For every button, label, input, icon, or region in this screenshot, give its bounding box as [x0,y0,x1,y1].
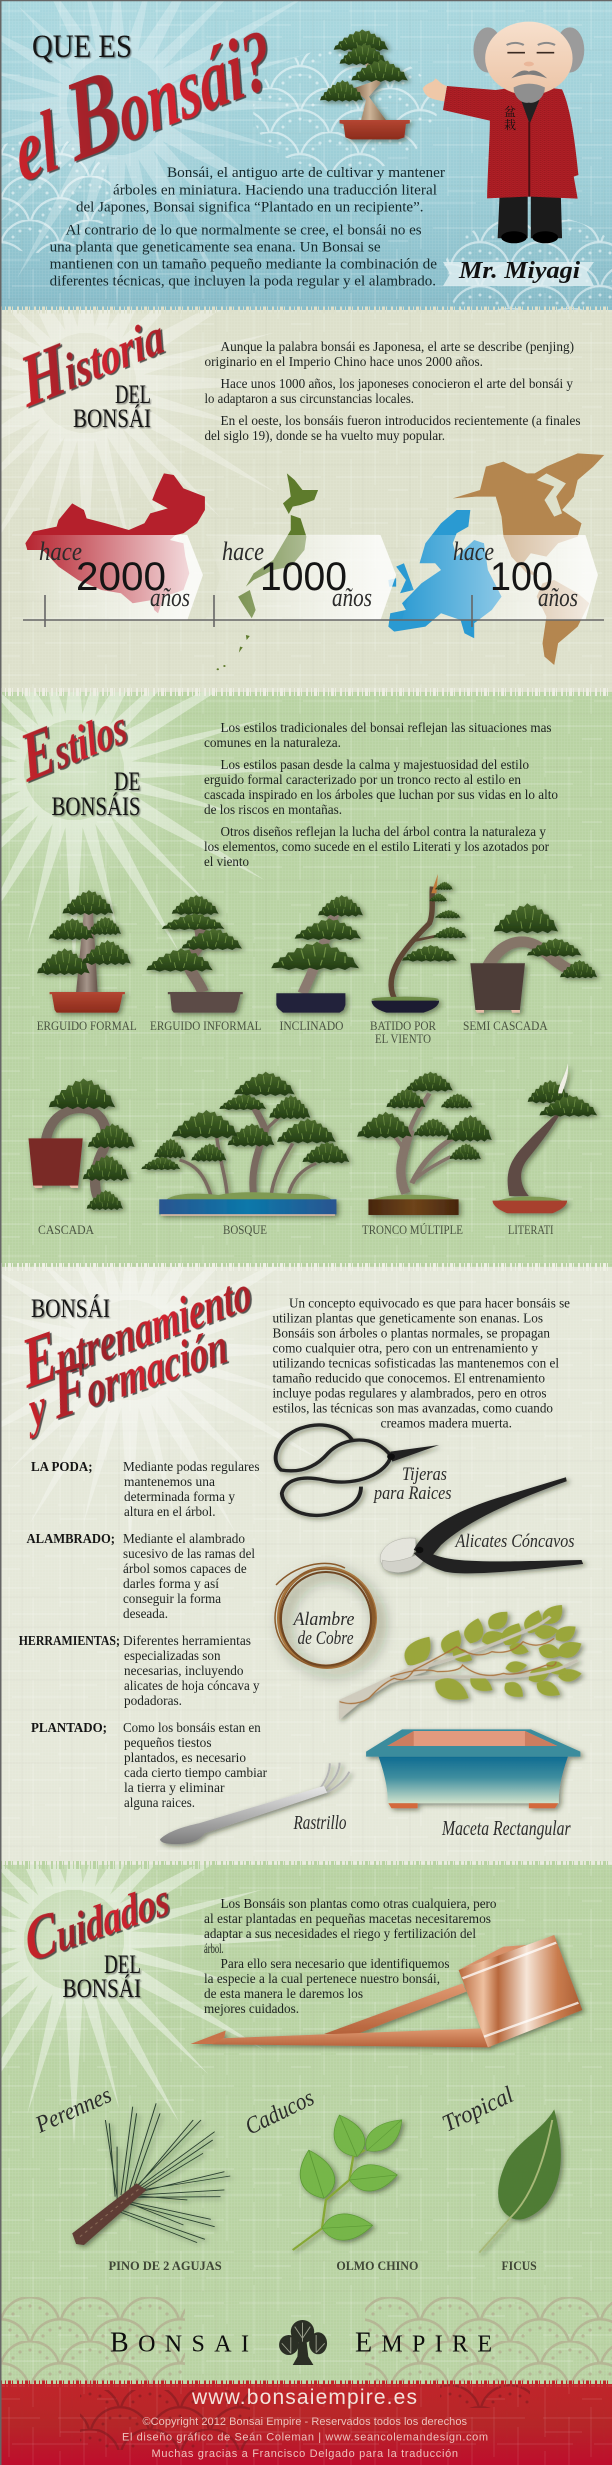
icon: chinese elm sprig [293,2111,411,2250]
label: tropical: Tropical [439,2082,518,2137]
heading: de bonsáis: DE [114,767,140,796]
species labels: PINO DE 2 AGUJAS [108,2258,222,2273]
label: hace 1000 años: hace [222,537,264,566]
text block: la poda [31,1460,260,1520]
species labels: OLMO CHINO [336,2258,418,2273]
heading: del bonsái [74,386,152,430]
panel: entrenamiento y formación [2,1267,612,1865]
tree: bosque [141,1072,349,1216]
logo mark: tree [279,2320,327,2365]
text block: la poda: Mediante podas regulares [123,1460,260,1475]
panel: historia del bonsái [2,310,612,692]
text block: concept: utilizan plantas que geneticamente son enanas. Los [272,1312,543,1327]
text block: concept: tamaño reducido que conocemos. El entrenamiento [272,1372,545,1387]
text block: intro: diferentes técnicas, que incluyen la poda regular y el alambrado. [50,274,436,290]
text block: plantado: plantados, es necesario [124,1751,246,1766]
label: alambre de cobre [292,1609,354,1649]
label: tijeras para raices: Tijeras [402,1464,447,1485]
labels row 1 [37,1022,548,1043]
heading: entrenamiento y formación: Entrenamiento [16,1246,256,1404]
text block: intro: mantienen con un tamaño pequeño mediante la combinación de [50,257,437,273]
heading: de bonsáis [52,772,142,818]
heading: del bonsái: BONSÁI [73,404,151,433]
tree: literati [493,1063,597,1213]
label: hace 100 años [454,542,578,606]
timeline with maps [23,453,604,670]
text block: herramientas: HERRAMIENTAS; [19,1634,120,1649]
label: hace 100 años: años [538,583,578,612]
panel: footer [0,2384,612,2465]
text block: care: árbol. [204,1942,224,1957]
text block: care: adaptar a sus necesidades el riego y fertilización del [204,1927,476,1942]
panel: estilos de bonsáis [2,692,612,1267]
text block: plantado [31,1721,267,1811]
label: alambre de cobre: de Cobre [298,1628,354,1649]
logo: bonsai empire: B ONSAI [110,2328,249,2359]
text block: history: originario en el Imperio Chino hace unos 2000 años. [204,355,483,370]
text block: herramientas: podadoras. [124,1694,182,1709]
label: hace 2000 años: hace [39,537,82,566]
text block: styles: comunes en la naturaleza. [204,736,341,751]
text block: history: lo adaptaron a sus circunstancias locales. [204,392,414,407]
labels row 1: SEMI CASCADA [463,1018,548,1033]
label: hace 2000 años [40,542,190,606]
tree: inclinado [271,895,363,1013]
icon: bonsai tree [320,29,410,139]
text block: care: mejores cuidados. [204,2002,299,2017]
text block: concept: incluye podas regulares y alambrados, pero en otros [272,1387,546,1402]
label: hace 100 años: 100 [490,555,553,599]
text block: care: Los Bonsáis son plantas como otras cualquiera, pero [220,1897,496,1912]
label: hace 2000 años: años [150,583,190,612]
heading: del bonsái: BONSÁI [62,1974,141,2003]
heading: de bonsáis: BONSÁIS [52,792,140,821]
icon: pine branch [72,2103,230,2245]
label: rastrillo: Rastrillo [293,1812,346,1834]
row of bonsai styles 1 [37,874,597,1013]
text block: alambrado: Mediante el alambrado [123,1532,245,1547]
text block: styles [204,721,558,870]
text block: care: de esta manera le daremos los [204,1987,363,2002]
text block: styles: Otros diseños reflejan la lucha del árbol contra la naturaleza y [220,825,546,840]
labels row 1: ERGUIDO INFORMAL [150,1018,262,1033]
text block: history [204,340,580,444]
heading: del bonsái: DEL [115,380,151,409]
label: maceta rectangular: Maceta Rectangular [441,1816,571,1840]
species labels [108,2258,537,2273]
footer url: www.bonsaiempire.es [191,2386,417,2409]
heading: del bonsái: DEL [104,1950,141,1979]
text block: styles: los elementos, como sucede en el estilo Literati y los azotados por [204,840,549,855]
label: hace 1000 años [222,542,372,606]
illustration: mr miyagi [423,22,584,243]
text block: plantado: la tierra y eliminar [124,1781,225,1796]
text block: alambrado [26,1532,255,1622]
text block: care: Para ello sera necesario que identifiquemos [220,1957,450,1972]
text block: concept [272,1297,570,1432]
text block: styles: Los estilos pasan desde la calma y majestuosidad del estilo [220,758,529,773]
text block: la poda: mantenemos una [124,1475,216,1490]
label: caducos: Caducos [241,2085,318,2140]
text block: alambrado: ALAMBRADO; [26,1532,115,1547]
panel: que es el bonsái [0,0,612,335]
text block: plantado: PLANTADO; [31,1721,107,1736]
text block: alambrado: sucesivo de las ramas del [123,1547,255,1562]
footer credits: Muchas gracias a Francisco Delgado para la traducción [152,2448,458,2460]
text block: intro: una planta que geneticamente sea enana. Un Bonsai se [50,240,381,256]
text block: plantado: cada cierto tiempo cambiar [124,1766,267,1781]
text block: alambrado: conseguir la forma [123,1592,222,1607]
icon: ficus leaf [479,2109,561,2253]
label: hace 2000 años: 2000 [76,555,166,599]
text block: concept: estilos, las técnicas son mas avanzadas, como cuando [272,1402,553,1417]
text block: plantado: alguna raices. [124,1796,195,1811]
tree: batido por el viento [372,874,466,1013]
text block: care: la especie a la cual pertenece nuestro bonsái, [204,1972,440,1987]
label: perennes: Perennes [31,2082,116,2139]
text block: intro: Bonsái, el antiguo arte de cultivar y mantener [167,165,445,181]
icon: rectangular pot [366,1729,580,1808]
text block: herramientas: alicates de hoja cóncava y [124,1679,260,1694]
text block: concept: creamos madera muerta. [380,1417,512,1432]
text block: la poda: LA PODA; [31,1460,92,1475]
label: tijeras para raices [372,1464,452,1504]
text block: history: Aunque la palabra bonsái es Japonesa, el arte se describe (penjing) [220,340,574,355]
text block: concept: Un concepto equivocado es que para hacer bonsáis se [289,1297,570,1312]
icon: rake [160,1763,349,1844]
text block: intro: árboles en miniatura. Haciendo una traducción literal [113,182,437,198]
text block: plantado: pequeños tiestos [124,1736,212,1751]
labels row 1: INCLINADO [280,1018,344,1033]
labels row 1: BATIDO POR [370,1018,436,1033]
text block: care: al estar plantadas en pequeñas macetas necesitaremos [204,1912,491,1927]
text block: concept: utilizando tecnicas sofisticadas las mantenemos con el [272,1357,559,1372]
text block: herramientas: especializadas son [124,1649,220,1664]
logo: bonsai empire: E MPIRE [355,2328,492,2359]
row of bonsai styles 2 [28,1063,597,1216]
name banner: mr miyagi: Mr. Miyagi [458,258,580,284]
heading: entrenamiento y formación [16,1246,256,1444]
labels row 2: TRONCO MÚLTIPLE [362,1222,463,1237]
tree: tronco múltiple [357,1072,492,1215]
heading: del bonsái [62,1950,141,2003]
labels row 2: BOSQUE [223,1222,267,1237]
species labels: FICUS [502,2258,537,2273]
text block: history: Hace unos 1000 años, los japoneses conocieron el arte del bonsái y [220,377,573,392]
text block: intro: del Japones, Bonsai significa “Plantado en un recipiente”. [76,200,424,216]
timeline axis [23,595,604,627]
label: tijeras para raices: para Raices [372,1483,452,1504]
label: hace 1000 años: años [332,583,372,612]
text block: styles: el viento [204,855,249,870]
map: europe [388,510,502,638]
text block: history: del siglo 19), donde se ha vuelto muy popular. [204,429,445,444]
text block: concept: Bonsáis son árboles o plantas normales, se propagan [272,1327,550,1342]
text block: herramientas: Diferentes herramientas [123,1634,251,1649]
text block: styles: cascada inspirado en los árboles que luchan por sus vidas en lo alto [204,788,558,803]
tree: erguido informal [146,895,243,1013]
label: alambre de cobre: Alambre [292,1609,354,1630]
text block: herramientas [19,1634,260,1709]
icon: copper wire coil [275,1563,376,1668]
labels row 1: ERGUIDO FORMAL [37,1018,137,1033]
footer credits: ©Copyright 2012 Bonsai Empire - Reservados todos los derechos [142,2416,468,2428]
labels row 2: LITERATI [508,1222,554,1237]
text block: herramientas: necesarias, incluyendo [124,1664,244,1679]
tree: erguido formal [37,890,131,1013]
labels row 2: CASCADA [38,1222,95,1237]
icon: watering can [190,1935,582,2047]
footer credits [122,2416,488,2460]
tree: cascada [28,1078,135,1210]
text block: intro [50,165,445,290]
footer credits: El diseño gráfico de Seán Coleman | www.seancolemandesign.com [122,2432,488,2444]
icon: wired branch with leaves [339,1600,586,1720]
kanji on robe: 盆 [504,103,516,120]
heading: historia: Historia [13,287,169,423]
illustration: mr miyagi: 栽 [504,116,516,133]
label: hace 1000 años: 1000 [260,555,347,599]
heading: bonsái: BONSÁI [31,1294,110,1323]
text block: intro: Al contrario de lo que normalmente se cree, el bonsái no es [66,222,422,238]
map: japan [217,473,318,670]
name banner: mr miyagi [443,261,594,286]
text block: styles: Los estilos tradicionales del bonsai reflejan las situaciones mas [220,721,552,736]
text block: alambrado: deseada. [123,1607,168,1622]
text block: alambrado: darles forma y así [123,1577,219,1592]
text block: la poda: determinada forma y [124,1490,235,1505]
heading: cuidados: Cuidados [21,1860,173,1976]
tree: semi cascada [470,903,597,1013]
labels row 1: EL VIENTO [375,1031,431,1046]
panel: cuidados del bonsái [0,1780,612,2384]
logo: bonsai empire [110,2320,492,2365]
icon: scissors [276,1425,439,1515]
text block: history: En el oeste, los bonsáis fueron introducidos recientemente (a finales [220,414,580,429]
text block: alambrado: árbol somos capaces de [123,1562,247,1577]
map: americas [453,453,604,665]
map: china [25,473,205,613]
text block: concept: como cualquier otra, pero con un entrenamiento y [272,1342,538,1357]
text block: la poda: altura en el árbol. [124,1505,216,1520]
text block: styles: de los riscos en montañas. [204,803,342,818]
label: hace 100 años: hace [453,537,494,566]
heading: estilos: Estilos [14,681,132,797]
labels row 2 [38,1223,554,1236]
label: alicates cóncavos: Alicates Cóncavos [454,1531,574,1552]
icon: concave pliers [380,1477,583,1573]
text block: care [204,1897,496,2017]
text block: styles: erguido formal caracterizado por un tronco recto al estilo en [204,773,521,788]
heading: que es: QUE ES [32,29,132,65]
text block: plantado: Como los bonsáis estan en [123,1721,261,1736]
heading: entrenamiento y formación: y Formación [19,1299,232,1444]
